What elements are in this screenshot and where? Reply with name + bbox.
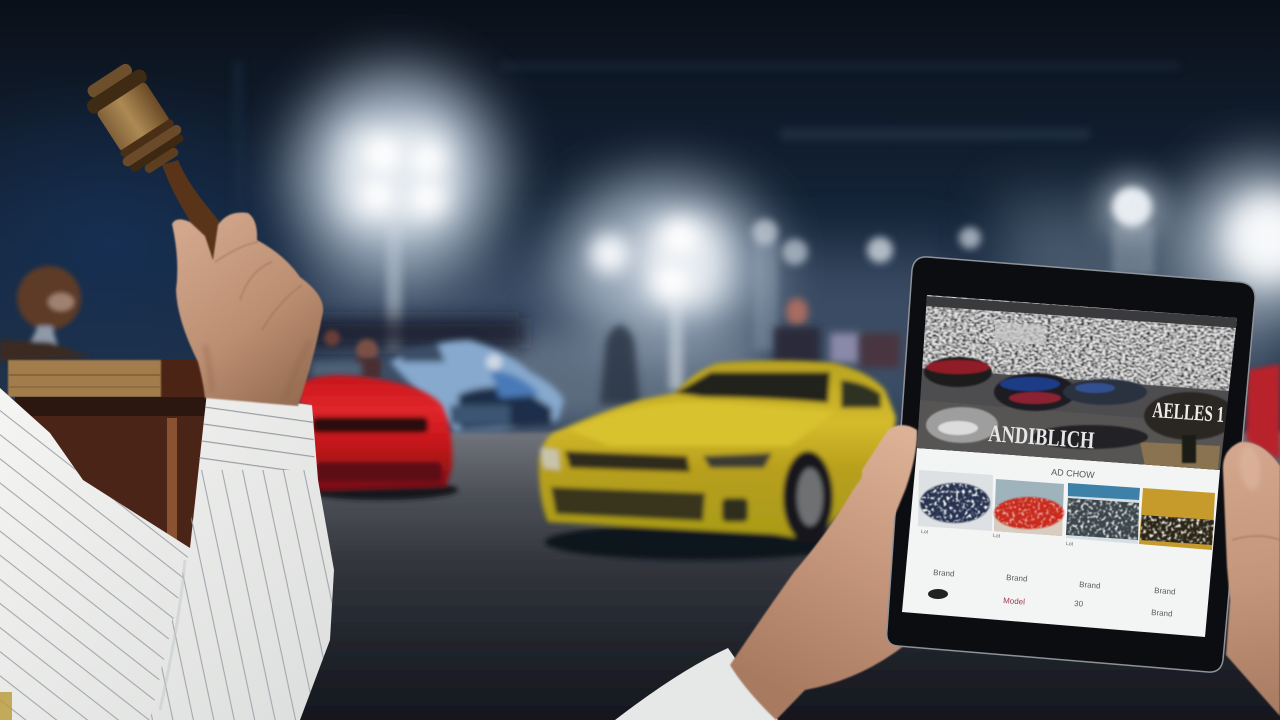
thumbnail: teal cars xyxy=(1066,483,1140,544)
tablet listing labels: Brand xyxy=(1151,608,1173,618)
tablet listing labels xyxy=(921,529,1176,618)
right hand fingers over tablet xyxy=(1223,442,1280,716)
gavel xyxy=(78,57,222,262)
tablet listing labels: 30 xyxy=(1074,599,1084,609)
car: red right edge xyxy=(1246,364,1280,460)
floor xyxy=(0,432,1280,720)
spotlights xyxy=(292,70,1280,390)
podium with books and globe xyxy=(0,266,210,566)
tablet listing labels: Brand xyxy=(933,568,955,578)
right arm sleeve xyxy=(615,648,778,720)
spotlight: large left xyxy=(292,70,502,280)
car: blue xyxy=(312,340,564,432)
left hand holding tablet xyxy=(730,432,930,720)
tablet listing labels: Lot xyxy=(1066,541,1074,548)
spotlight: far right xyxy=(1185,160,1280,320)
tablet body xyxy=(887,257,1255,672)
car: yellow xyxy=(539,360,896,560)
thumbnail: blue cars xyxy=(915,470,995,531)
tablet screen: banner photo xyxy=(917,295,1237,470)
thumbnail: red cars xyxy=(990,479,1070,536)
gavel head xyxy=(78,57,192,183)
gavel handle xyxy=(162,160,222,262)
tablet xyxy=(887,257,1255,672)
banner text: ANDIBLICH xyxy=(988,421,1095,454)
tablet heading: AD CHOW xyxy=(1051,467,1095,480)
left arm in striped shirt xyxy=(0,388,334,720)
tablet listing labels: Model xyxy=(1003,596,1025,607)
left hand gripping gavel xyxy=(172,212,323,406)
thumbnail: gold cars xyxy=(1139,488,1215,550)
tablet listing labels: Brand xyxy=(1154,586,1176,596)
banner text right: AELLES 1 xyxy=(1152,398,1225,428)
tablet listing labels: Lot xyxy=(993,533,1001,540)
tablet screen: white lower panel xyxy=(902,448,1220,637)
tablet listing labels: Brand xyxy=(1006,573,1028,583)
tablet listing labels: Lot xyxy=(921,529,929,536)
spotlight: right tall xyxy=(1100,175,1164,239)
crowd silhouettes xyxy=(300,298,900,405)
spotlight: centre cluster xyxy=(560,177,770,347)
left thumb over tablet xyxy=(860,425,917,545)
car: red xyxy=(298,375,458,500)
tablet listing labels: Brand xyxy=(1079,580,1101,590)
